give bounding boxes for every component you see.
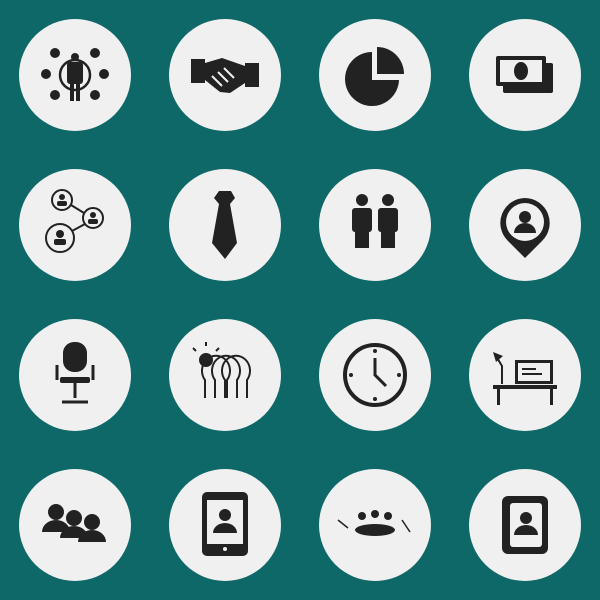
icon: location person bbox=[500, 198, 550, 258]
icon: handshake bbox=[191, 58, 259, 93]
icon: tie bbox=[212, 191, 237, 259]
icon: office chair bbox=[57, 342, 93, 402]
icon: two people bbox=[352, 194, 398, 248]
icon: money bbox=[496, 56, 553, 93]
icon: idea heads bbox=[193, 342, 250, 398]
icon: desk bbox=[493, 352, 557, 405]
icon: group bbox=[42, 504, 106, 542]
icon: address book bbox=[502, 496, 548, 554]
icon: person network bbox=[41, 48, 109, 101]
icon: pie chart bbox=[345, 47, 404, 106]
icon: meeting bbox=[338, 510, 410, 536]
icon: clock bbox=[345, 345, 405, 405]
icon: social connections bbox=[46, 190, 103, 252]
icon: tablet profile bbox=[202, 492, 248, 556]
